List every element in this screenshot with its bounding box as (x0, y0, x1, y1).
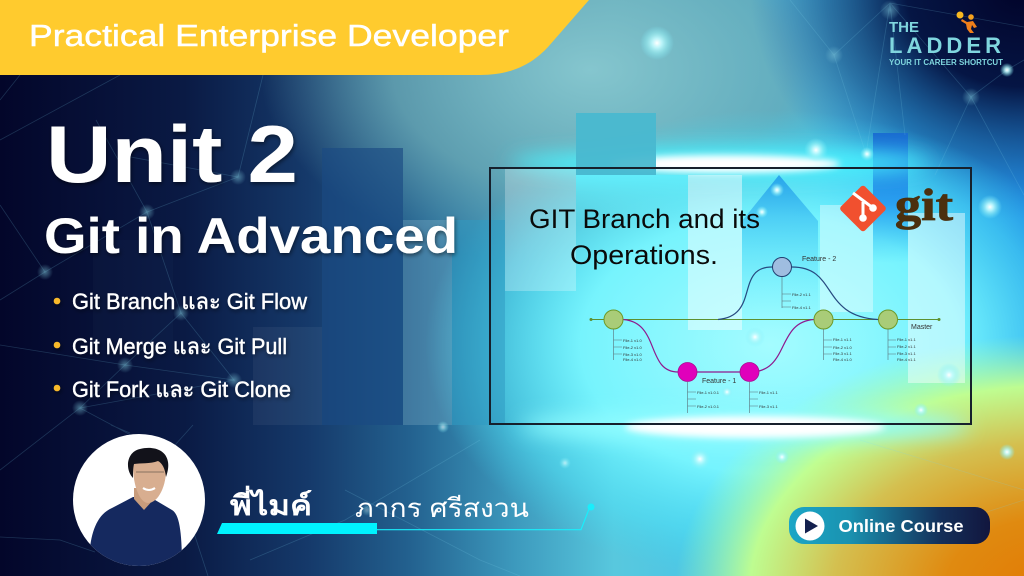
hair (128, 448, 168, 478)
commit nodes (604, 310, 898, 329)
neck and face (134, 488, 151, 510)
file lists: File-3 v1.1 (833, 351, 852, 356)
file lists: File-1 v1.0.1 (697, 390, 720, 395)
online course button (789, 507, 990, 544)
file lists: File-3 v1.0 (623, 352, 642, 357)
file lists: File-1 v1.0 (623, 338, 642, 343)
branch labels: Feature - 1 (702, 378, 736, 385)
branch labels: Feature - 2 (802, 256, 836, 263)
full name: ภากร ศรีสงวน (355, 493, 529, 523)
file lists: File-3 v1.1 (897, 351, 916, 356)
light glow bands (510, 150, 970, 441)
logo: The Ladder (889, 12, 1003, 67)
list item 1: Git Branch และ Git Flow (72, 289, 307, 314)
file lists: File-3 v1.1 (759, 404, 778, 409)
git logo: git (895, 180, 953, 230)
branch diagram (590, 256, 940, 413)
subtitle: Git in Advanced (44, 208, 458, 264)
list item 3: Git Fork และ Git Clone (72, 377, 291, 402)
file lists: File-4 v1.0 (833, 357, 852, 362)
banner title: Practical Enterprise Developer (29, 19, 509, 53)
mouth (143, 488, 155, 490)
file lists: File-4 v1.1 (897, 357, 916, 362)
file lists: File-2 v1.1 (792, 292, 811, 297)
feature 1 branch (623, 320, 814, 372)
header banner (0, 0, 589, 75)
topic list (54, 289, 307, 402)
file lists (623, 292, 916, 409)
sparkles (361, 26, 1015, 516)
slide heading: Operations. (570, 240, 718, 270)
network nodes (37, 0, 980, 416)
title: Unit 2: Unit 2 (46, 110, 298, 200)
presenter photo (73, 434, 205, 576)
logo: The Ladder: THE (889, 19, 919, 36)
name underline (217, 504, 594, 534)
feature 2 branch (718, 267, 878, 320)
branch labels (702, 256, 933, 385)
file lists: File-4 v1.1 (792, 305, 811, 310)
file lists: File-1 v1.1 (833, 337, 852, 342)
file lists: File-1 v1.1 (897, 337, 916, 342)
presenter name (217, 485, 594, 534)
slide heading: GIT Branch and its (529, 204, 760, 234)
upper bars (505, 113, 965, 383)
file lists: File-2 v1.0 (623, 345, 642, 350)
list item 2: Git Merge และ Git Pull (72, 334, 287, 359)
slide heading (529, 204, 760, 270)
nickname: พี่ไมค์ (230, 485, 312, 521)
file lists: File-4 v1.0 (623, 357, 642, 362)
logo: The Ladder: YOUR IT CAREER SHORTCUT (889, 58, 1003, 67)
icon: play (796, 512, 824, 540)
git logo (839, 180, 953, 233)
file lists: File-1 v1.1 (759, 390, 778, 395)
file lists: File-2 v1.0.1 (697, 404, 720, 409)
file lists: File-2 v1.1 (897, 344, 916, 349)
logo: The Ladder: LADDER (889, 33, 1001, 58)
background bars (93, 133, 908, 425)
icon: climber (956, 12, 977, 33)
shirt (90, 497, 182, 566)
file lists: File-2 v1.0 (833, 345, 852, 350)
master line (591, 318, 939, 320)
button label: Online Course (838, 516, 964, 536)
slide panel: git branch diagram (490, 168, 971, 424)
glasses (136, 471, 164, 473)
branch labels: Master (911, 324, 933, 331)
